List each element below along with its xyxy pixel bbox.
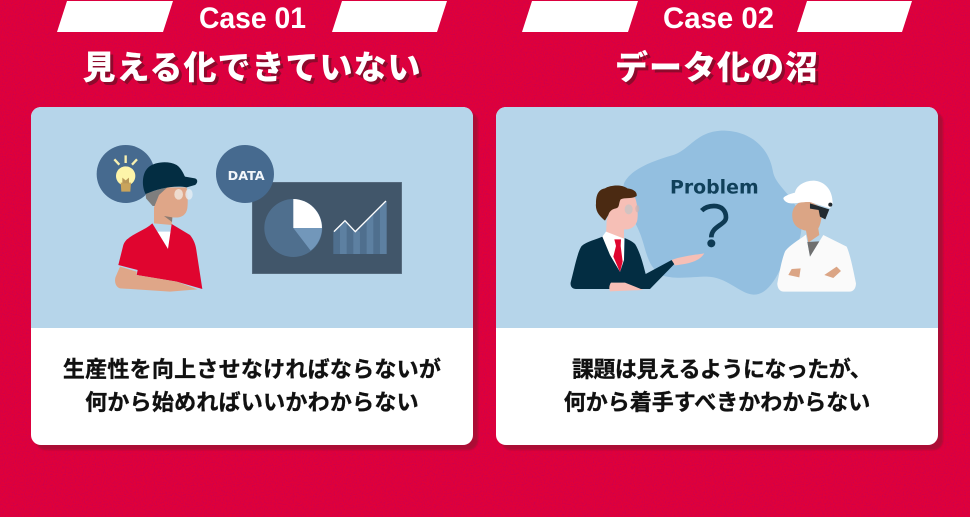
case 02 header banner bbox=[522, 1, 912, 35]
pie chart bbox=[264, 199, 322, 257]
data board bbox=[252, 182, 402, 274]
line chart with bars bbox=[333, 201, 387, 254]
worker figure bbox=[115, 162, 202, 292]
data badge: DATA bbox=[228, 168, 265, 183]
case 01 heading: 見える化できていない bbox=[85, 44, 425, 92]
case 01 description bbox=[63, 352, 441, 417]
data badge bbox=[216, 145, 274, 203]
case 01 header banner bbox=[57, 1, 447, 35]
case 02 description bbox=[564, 352, 871, 417]
factory worker bbox=[777, 181, 856, 292]
panel: case 01 bbox=[31, 1, 478, 450]
case 01 description: 生産性を向上させなければならないが bbox=[63, 352, 441, 384]
case 02 heading: データ化の沼 bbox=[615, 41, 819, 89]
illustration: businessman and worker discussing a problem bbox=[571, 131, 856, 295]
case 02 card bbox=[496, 107, 943, 450]
case 01 header banner: Case 01 bbox=[199, 2, 306, 35]
case 02 heading: データ化の沼 bbox=[618, 44, 822, 92]
case 01 description: 何から始めればいいかわからない bbox=[85, 385, 419, 417]
case 02 description: 課題は見えるようになったが、 bbox=[572, 352, 871, 384]
problem blob bbox=[623, 131, 801, 295]
businessman bbox=[571, 185, 704, 291]
icon: light bulb circle bbox=[97, 145, 155, 203]
case 01 card bbox=[31, 107, 478, 450]
case 02 description: 何から着手すべきかわからない bbox=[564, 385, 870, 417]
case 02 header banner: Case 02 bbox=[663, 2, 774, 35]
problem label bbox=[670, 177, 759, 247]
panel: case 02 bbox=[496, 1, 943, 450]
problem label: Problem bbox=[670, 177, 759, 198]
illustration: worker with data board bbox=[97, 145, 402, 292]
case 01 heading: 見える化できていない bbox=[82, 41, 422, 89]
